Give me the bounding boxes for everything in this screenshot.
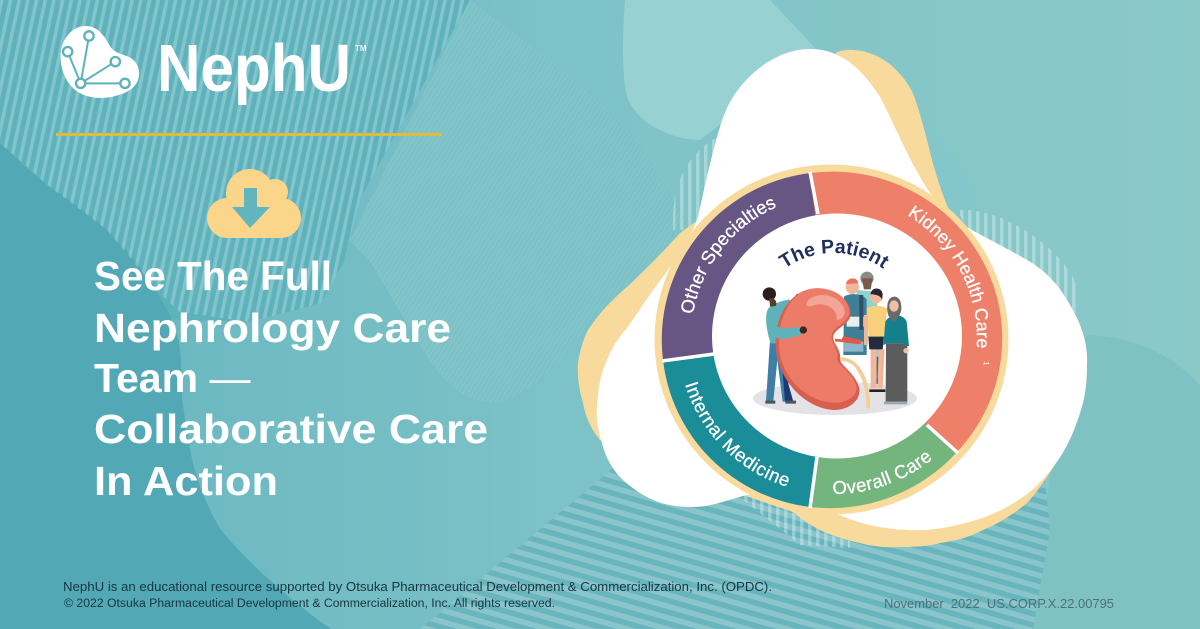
logo wordmark: NephU	[157, 31, 351, 106]
person: man in cap	[843, 278, 867, 355]
label: Overall Care: Overall Care	[833, 452, 932, 494]
label: Other Specialties: Other Specialties	[681, 199, 776, 313]
segment: Internal Medicine	[663, 340, 831, 507]
headline: Collaborative Care	[94, 406, 488, 452]
segment: Other Specialties	[662, 173, 831, 360]
icon: download cloud	[207, 169, 301, 238]
person: older man	[857, 272, 883, 384]
headline: Team —	[94, 355, 250, 401]
inner white circle	[712, 214, 962, 458]
cream blob	[578, 50, 1055, 547]
label: footnote mark: 1	[982, 361, 991, 367]
person: woman in yellow	[864, 288, 887, 392]
logo: NephU	[61, 26, 367, 106]
cream ring	[654, 164, 1008, 514]
footer: copyright: © 2022 Otsuka Pharmaceutical Development & Commercialization, Inc. All rights reserved.	[64, 598, 555, 610]
illustration: patients with kidney	[753, 272, 917, 415]
segment: Overall Care	[810, 340, 957, 508]
segment: Kidney Health Care	[810, 172, 1002, 452]
white blob	[597, 49, 1087, 530]
man's arm around kidney	[770, 323, 807, 339]
headline	[94, 253, 488, 504]
kidney	[776, 288, 860, 410]
person: left man	[763, 287, 801, 404]
label: The Patient: The Patient	[778, 240, 889, 268]
headline: Nephrology Care	[94, 305, 451, 351]
care team diagram	[578, 49, 1088, 548]
footer: sponsor statement: NephU is an educational resource supported by Otsuka Pharmaceutical Development & Commercialization, Inc. (OPDC).	[63, 579, 772, 594]
label: Kidney Health Care: Kidney Health Care	[908, 205, 988, 348]
trademark: TM	[355, 44, 367, 53]
ureter and vessels	[833, 334, 868, 408]
person: woman in hijab	[883, 297, 909, 404]
label: Internal Medicine: Internal Medicine	[685, 382, 789, 486]
ground shadow	[753, 382, 917, 415]
logo mark: kidney network	[61, 26, 139, 98]
footer: date and code: November 2022 US.CORP.X.22.00795	[884, 597, 1114, 611]
headline: In Action	[94, 458, 278, 504]
headline: See The Full	[94, 253, 332, 299]
